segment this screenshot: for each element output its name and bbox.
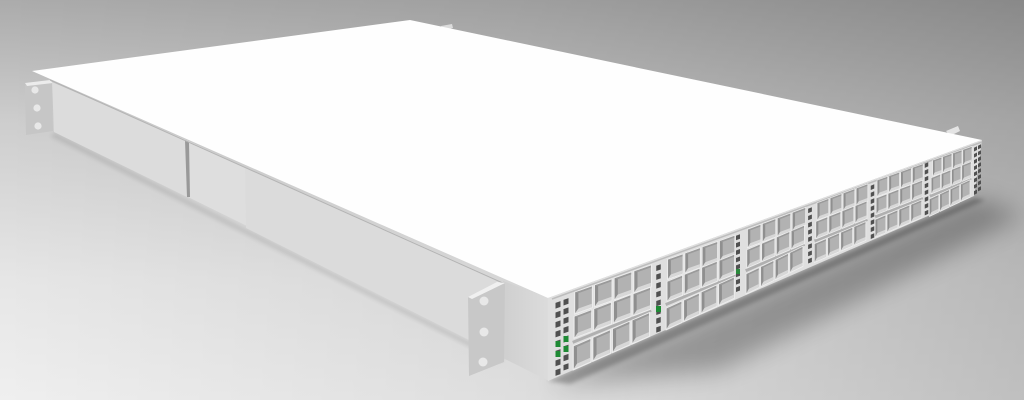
- port strip 6: [925, 162, 928, 215]
- side panel: front: [245, 167, 505, 358]
- port strip: front double column: [556, 298, 568, 376]
- corner end face: [503, 281, 549, 381]
- port strip: far double column: [974, 144, 981, 195]
- panel top edge line: [50, 80, 505, 284]
- side panel: recessed middle: [186, 140, 247, 226]
- floor shadow: [50, 133, 1024, 386]
- bay 4: [814, 183, 868, 263]
- panel gap: [185, 140, 190, 197]
- front edge shadow: [552, 142, 982, 299]
- top cover: [32, 20, 982, 298]
- port strip 2: [656, 264, 661, 333]
- bay 5: [875, 163, 923, 238]
- port strip 5: [871, 184, 874, 239]
- rear mounting bracket: [25, 80, 53, 135]
- bay 6: [929, 146, 972, 217]
- front face base: [548, 140, 982, 381]
- bay 3: [746, 207, 806, 295]
- front mounting bracket: [468, 282, 505, 376]
- port strip 4: [808, 207, 812, 263]
- port strip 3: [736, 234, 740, 292]
- bay 2: [666, 235, 735, 331]
- bay 1: [573, 264, 652, 371]
- rear tabs: [441, 24, 960, 136]
- side panel: rear: [52, 82, 187, 197]
